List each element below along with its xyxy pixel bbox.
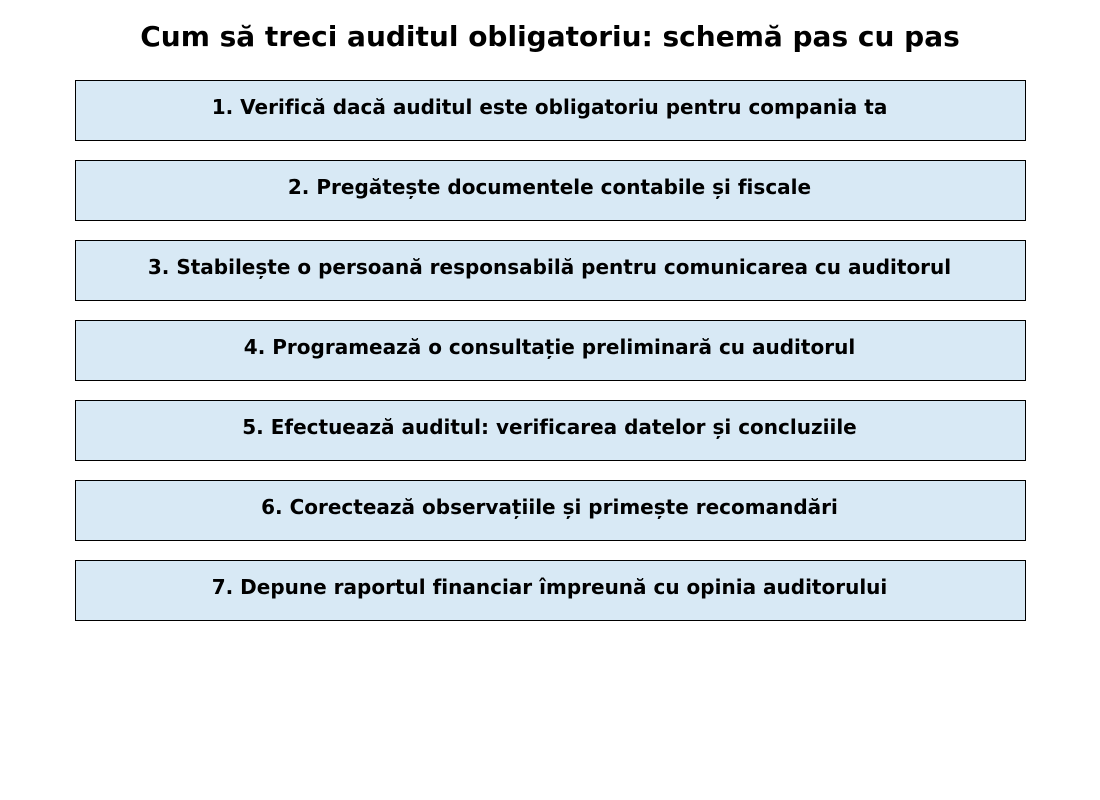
step 4 box: 4. Programează o consultație preliminară cu auditorul	[244, 335, 855, 359]
step 5 box	[75, 400, 1026, 461]
step 1 box: 1. Verifică dacă auditul este obligatoriu pentru compania ta	[212, 95, 887, 119]
step 3 box: 3. Stabilește o persoană responsabilă pentru comunicarea cu auditorul	[148, 255, 951, 279]
step 5 box: 5. Efectuează auditul: verificarea datelor și concluziile	[242, 415, 857, 439]
step 2 box: 2. Pregătește documentele contabile și fiscale	[288, 175, 811, 199]
step 7 box	[75, 560, 1026, 621]
step 3 box	[75, 240, 1026, 301]
step 7 box: 7. Depune raportul financiar împreună cu opinia auditorului	[212, 575, 887, 599]
step 2 box	[75, 160, 1026, 221]
step 1 box	[75, 80, 1026, 141]
step 4 box	[75, 320, 1026, 381]
step 6 box: 6. Corectează observațiile și primește recomandări	[261, 495, 838, 519]
step 6 box	[75, 480, 1026, 541]
title: Cum să treci auditul obligatoriu: schemă pas cu pas	[140, 20, 960, 53]
